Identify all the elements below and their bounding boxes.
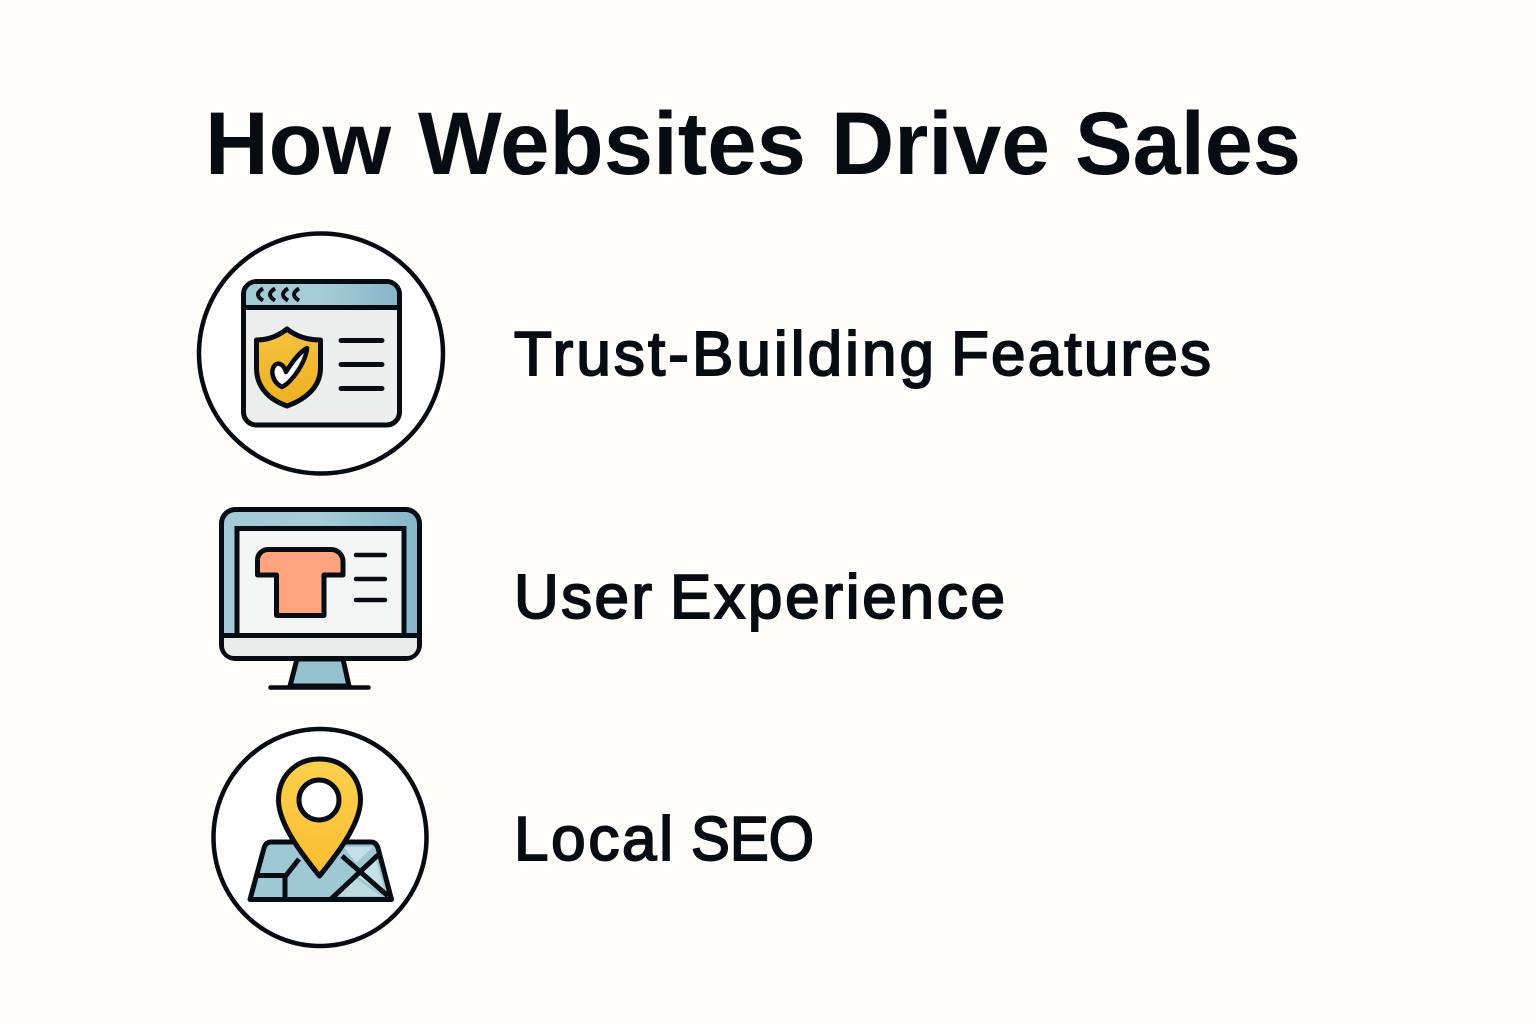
row: trust-building features [199, 234, 1211, 474]
row: user experience [221, 510, 1005, 688]
title: Websites [418, 93, 806, 193]
title: Drive [831, 93, 1050, 193]
label: trust-building features [514, 320, 1211, 389]
title [205, 93, 1301, 193]
row: local seo [214, 729, 814, 946]
title: Sales [1075, 93, 1301, 193]
label: local seo [514, 805, 814, 874]
icon: map pin on map [214, 729, 426, 946]
icon: browser window with shield [199, 234, 443, 474]
label: trust-building features: Features [951, 320, 1211, 389]
label: local seo: Local [514, 805, 673, 874]
title: How [205, 93, 392, 193]
icon: desktop monitor with t-shirt [221, 510, 420, 688]
label: user experience [514, 563, 1005, 632]
label: local seo: SEO [691, 805, 814, 874]
label: user experience: Experience [670, 563, 1005, 632]
label: trust-building features: Trust-Building [514, 320, 934, 389]
label: user experience: User [514, 563, 652, 632]
